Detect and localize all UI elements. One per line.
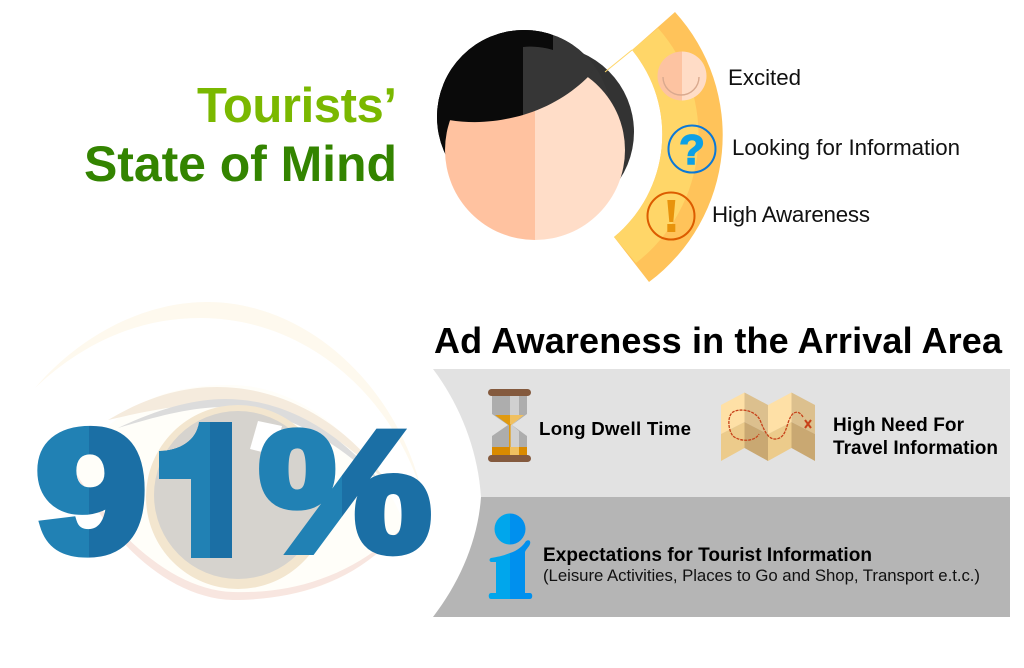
label: high need for travel information (833, 415, 998, 459)
text: expectations for tourist information: (Leisure Activities, Places to Go and Shop, Transport e.t.c.) (543, 566, 980, 585)
big number: 91%: 1 (153, 392, 266, 590)
big number: 91%: 9 (36, 396, 146, 588)
eye graphic (35, 302, 423, 600)
icon: excited face (658, 52, 706, 100)
icon: exclamation mark (648, 192, 694, 240)
panel: tourist information (433, 497, 1010, 617)
label: high awareness: High Awareness (712, 202, 870, 227)
text: expectations for tourist information (543, 545, 980, 585)
panel: long dwell time and travel information (433, 369, 1010, 497)
icon: head (430, 20, 634, 245)
text: expectations for tourist information: Expectations for Tourist Information (543, 545, 872, 566)
icon: question mark (668, 126, 716, 173)
icon: question mark: ? (679, 126, 705, 173)
label: long dwell time: Long Dwell Time (539, 418, 691, 439)
icon: hourglass (488, 389, 531, 462)
icon: information (489, 514, 532, 599)
big number: 91% (37, 422, 431, 558)
label: excited: Excited (728, 65, 801, 90)
icon: map (721, 392, 815, 461)
heading: ad awareness: Ad Awareness in the Arrival Area (434, 320, 1003, 361)
label: high need for travel information: High Need For (833, 415, 965, 436)
title: Tourists’ (197, 79, 397, 133)
big number: 91%: % (259, 395, 432, 588)
label: high need for travel information: Travel Information (833, 438, 998, 459)
title: State of Mind (84, 136, 397, 192)
title (84, 79, 397, 192)
label: looking for information: Looking for Information (732, 135, 960, 160)
mood band (605, 12, 723, 282)
